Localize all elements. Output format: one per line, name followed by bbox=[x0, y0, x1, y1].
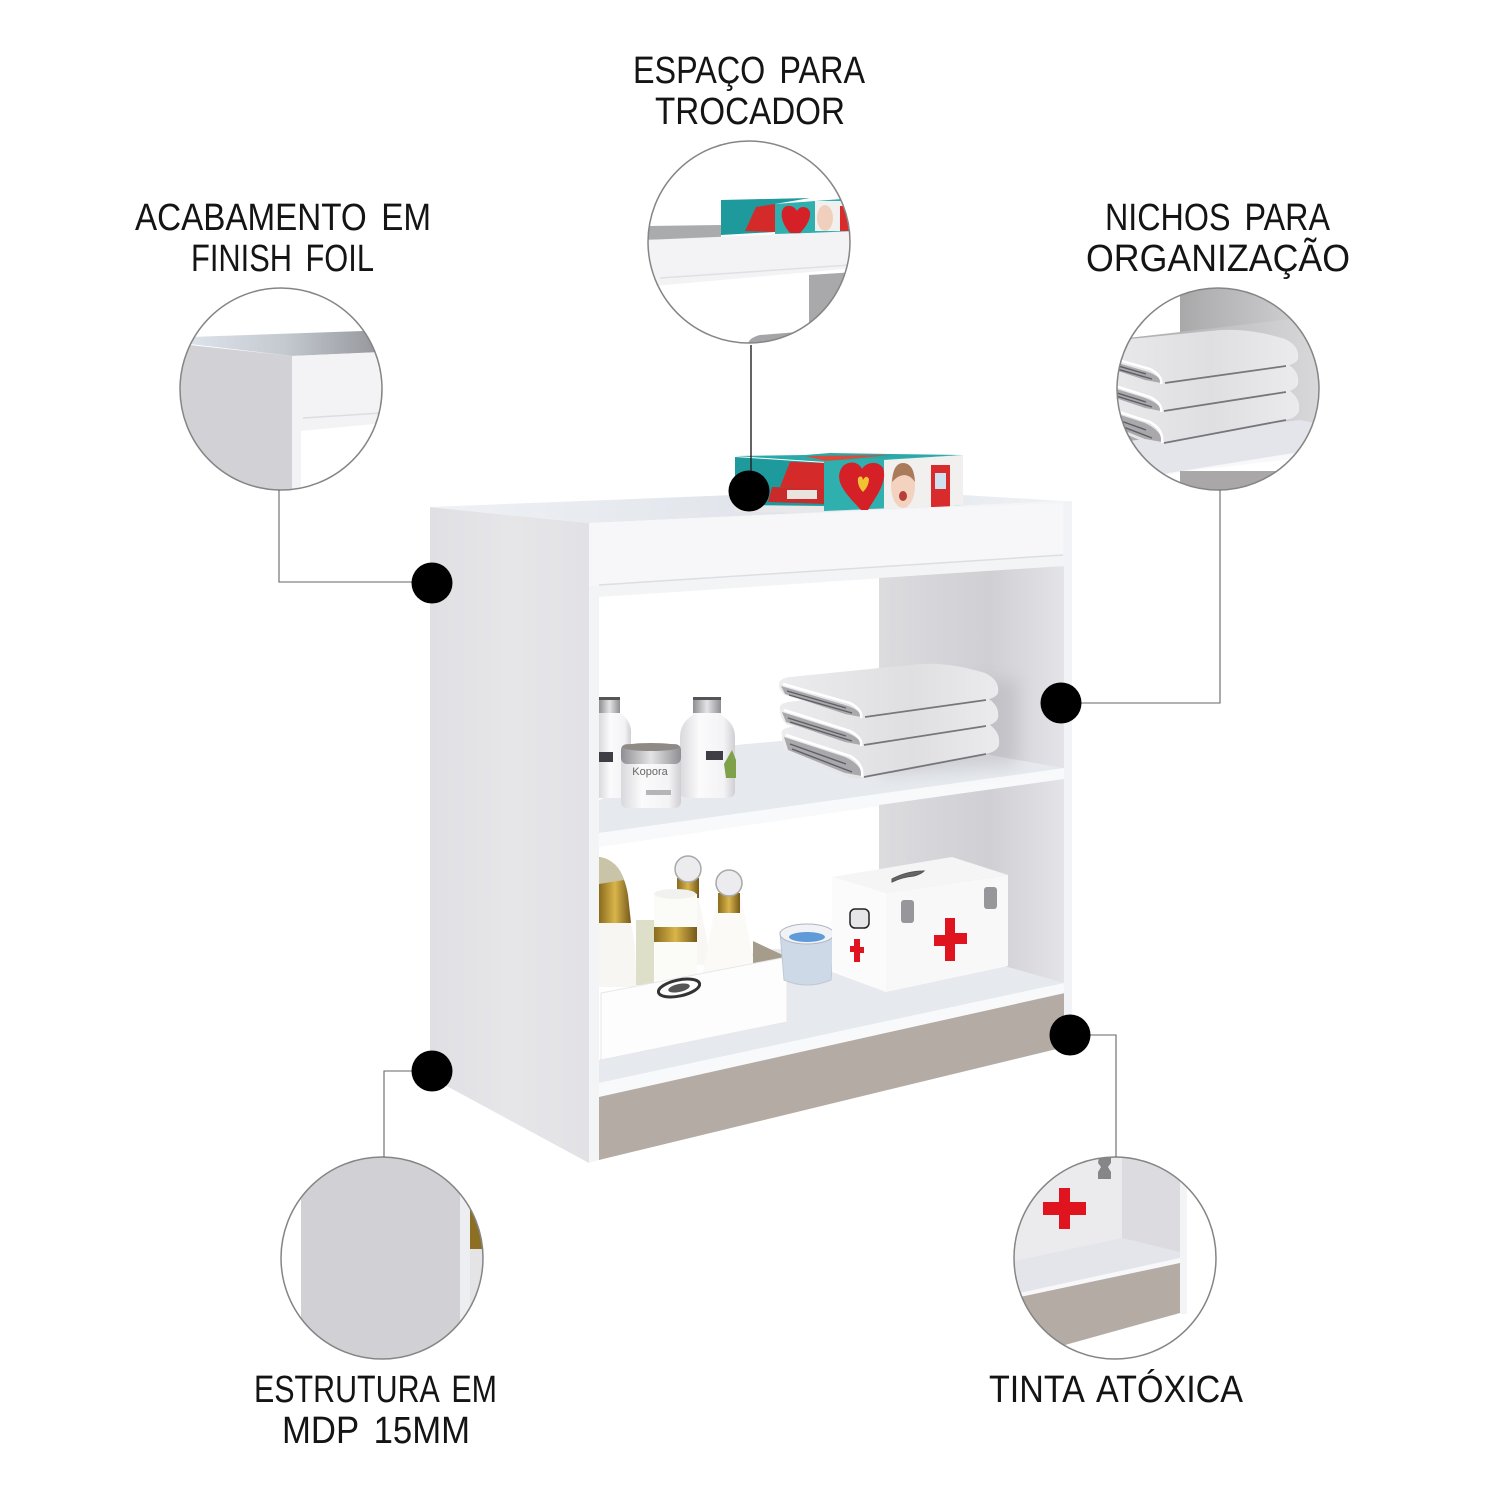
leader line bbox=[1070, 1035, 1116, 1157]
tray interior bbox=[430, 495, 1063, 523]
callout: acabamento em finish foil bbox=[135, 197, 452, 604]
leader line bbox=[750, 345, 752, 490]
detail circle: tray with box bbox=[648, 198, 849, 342]
detail circle: plinth and cross bbox=[1014, 1158, 1187, 1345]
marker dot bbox=[412, 1050, 452, 1092]
storage box bbox=[601, 941, 787, 1060]
heading: estrutura: MDP 15MM bbox=[282, 1410, 470, 1452]
leader line bbox=[279, 490, 432, 582]
gold and white bottles bbox=[599, 856, 757, 987]
first aid box bbox=[832, 857, 1008, 992]
circle outline bbox=[180, 288, 382, 490]
callout: espaço para trocador bbox=[633, 50, 866, 512]
heading: trocador: TROCADOR bbox=[655, 91, 845, 133]
detail circle: towels bbox=[1118, 288, 1318, 490]
furniture: changing table bbox=[430, 453, 1072, 1163]
heading: trocador bbox=[633, 50, 866, 133]
infographic canvas bbox=[135, 56, 1348, 1444]
upper niche opening bbox=[599, 566, 1064, 847]
front frame bbox=[589, 501, 1072, 1163]
heading: tinta: TINTA ATÓXICA bbox=[989, 1368, 1244, 1411]
leader line bbox=[384, 1071, 432, 1157]
heading: acabamento bbox=[135, 197, 431, 280]
right post bbox=[1064, 501, 1072, 1047]
marker dot bbox=[728, 470, 770, 512]
heading: acabamento: ACABAMENTO EM bbox=[135, 197, 431, 239]
towel shadow bbox=[880, 680, 1018, 775]
heading: trocador: ESPAÇO PARA bbox=[633, 50, 866, 92]
upper shelf bbox=[599, 732, 1064, 847]
lower shelf bbox=[599, 945, 1065, 1097]
side panel bbox=[430, 507, 589, 1163]
top rail bbox=[589, 503, 1063, 586]
circle outline bbox=[281, 1157, 483, 1359]
leader line bbox=[1061, 490, 1220, 703]
marker dot bbox=[412, 562, 452, 604]
bottles and jar: Kopora bbox=[632, 766, 669, 778]
marker dot bbox=[1050, 1014, 1090, 1056]
callout: nichos para organização bbox=[1040, 197, 1350, 724]
heading: nichos bbox=[1086, 197, 1350, 280]
heading: nichos: NICHOS PARA bbox=[1105, 197, 1331, 239]
lower niche opening bbox=[599, 779, 1064, 1083]
heading: estrutura bbox=[254, 1369, 497, 1452]
heading: acabamento: FINISH FOIL bbox=[191, 238, 374, 280]
marker dot bbox=[1040, 682, 1082, 724]
heading: estrutura: ESTRUTURA EM bbox=[254, 1369, 497, 1411]
bottles and jar bbox=[599, 697, 736, 808]
circle outline bbox=[1117, 288, 1319, 490]
heading: nichos: ORGANIZAÇÃO bbox=[1086, 237, 1350, 280]
callout: estrutura em mdp 15mm bbox=[254, 1050, 497, 1452]
detail circle: finish foil corner bbox=[180, 331, 381, 490]
diaper box bbox=[735, 453, 963, 513]
plinth bbox=[599, 993, 1065, 1160]
callout: tinta atóxica bbox=[989, 1014, 1244, 1411]
detail circle: side panel bbox=[301, 1158, 482, 1358]
lower back panel bbox=[879, 779, 1064, 1000]
circle outline bbox=[1014, 1157, 1216, 1359]
upper back panel bbox=[879, 566, 1064, 790]
folded towels bbox=[779, 664, 999, 779]
circle outline bbox=[648, 141, 850, 343]
cotton swab cup bbox=[780, 924, 835, 985]
